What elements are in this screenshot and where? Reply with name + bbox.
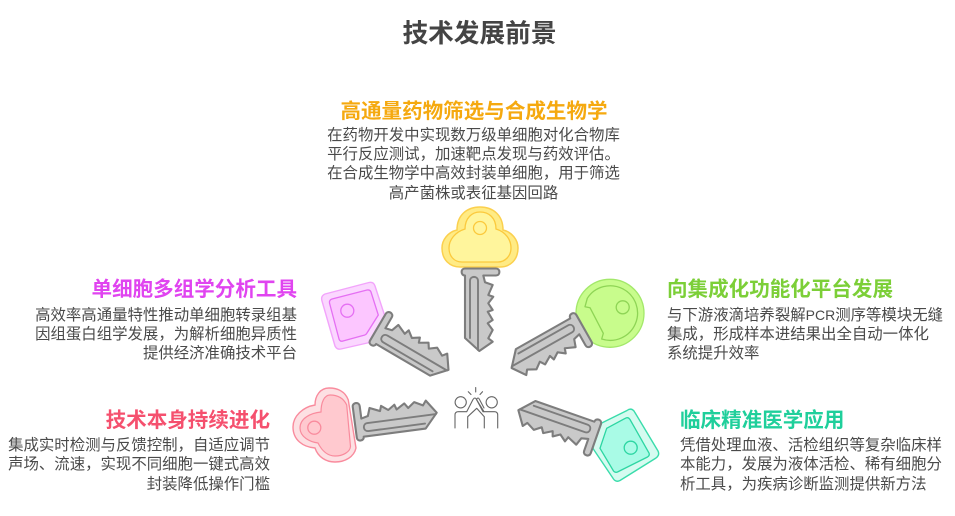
text: single-cell omics description (35, 306, 297, 362)
text: integration description: 系统提升效率 (667, 345, 759, 362)
text: technology evolution description: 封装降低操作门槛 (147, 476, 270, 493)
text: integration description (667, 306, 943, 362)
text: drug screening description (327, 126, 620, 202)
text: integration description: 集成，形成样本进结果出全自动一体化 (667, 326, 929, 343)
text: clinical medicine description: 本能力，发展为液体活检、稀有细胞分 (680, 456, 942, 473)
key: teal (512, 394, 659, 481)
text: single-cell omics description: 高效率高通量特性推动单细胞转录组基 (35, 306, 297, 324)
panel: technology evolution heading: 技术本身持续进化 (106, 409, 270, 432)
text: single-cell omics description: 提供经济准确技术平台 (143, 345, 297, 362)
text: clinical medicine description: 凭借处理血液、活检组织等复杂临床样 (680, 437, 942, 454)
text: technology evolution description: 声场、流速，实现不同细胞一键式高效 (8, 456, 270, 473)
text: clinical medicine description: 析工具，为疾病诊断监测提供新方法 (680, 476, 926, 493)
text: single-cell omics description: 因组蛋白组学发展，为解析细胞异质性 (35, 326, 297, 343)
text: technology evolution description: 集成实时检测与反馈控制，自适应调节 (8, 437, 270, 454)
key: red (293, 388, 439, 462)
text: integration description: 与下游液滴培养裂解PCR测序等模块无缝 (667, 306, 943, 324)
panel: integration heading: 向集成化功能化平台发展 (667, 278, 893, 301)
key: yellow (442, 207, 518, 351)
text: drug screening description: 在合成生物学中高效封装单细胞，用于筛选 (327, 165, 620, 182)
icon: high five (455, 388, 498, 428)
panel: single-cell omics heading: 单细胞多组学分析工具 (92, 278, 297, 301)
text: clinical medicine description (680, 436, 942, 493)
key: green (503, 279, 644, 385)
panel: clinical medicine heading: 临床精准医学应用 (680, 409, 844, 432)
text: drug screening description: 平行反应测试，加速靶点发现与药效评估。 (327, 146, 620, 163)
text: technology evolution description (8, 436, 270, 493)
key: pink (322, 282, 459, 385)
text: drug screening description: 在药物开发中实现数万级单细胞对化合物库 (327, 126, 620, 144)
title: 技术发展前景 (402, 20, 557, 48)
panel: top drug screening heading: 高通量药物筛选与合成生物学 (340, 100, 608, 123)
text: drug screening description: 高产菌株或表征基因回路 (389, 185, 558, 202)
